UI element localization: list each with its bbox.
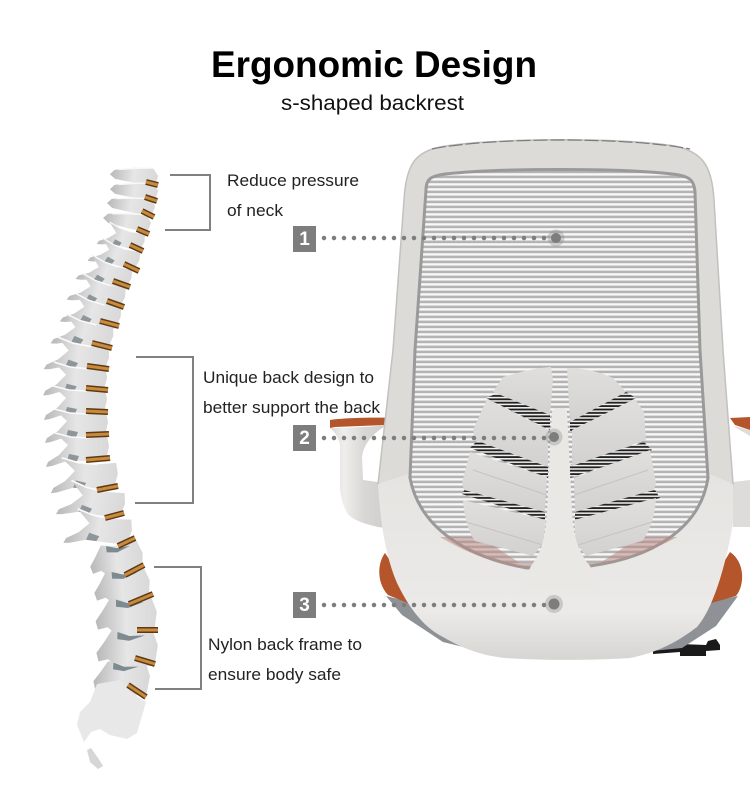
- text: nylon back frame: ensure body safe: [208, 665, 341, 684]
- mesh backrest: [410, 170, 708, 568]
- callout 2: 2: [299, 428, 310, 449]
- back frame: [378, 140, 733, 484]
- coccyx: [87, 748, 103, 769]
- callout 1: 1: [299, 229, 310, 250]
- subtitle: s-shaped backrest: [281, 92, 464, 115]
- intervertebral discs: [86, 182, 158, 697]
- cervical vertebrae: [102, 162, 159, 233]
- armrest pad left: [330, 418, 389, 428]
- thoracic vertebrae: [43, 220, 147, 496]
- text: unique back design: Unique back design to: [203, 368, 374, 387]
- frame lower base: [378, 470, 733, 660]
- armrest left: [330, 425, 387, 528]
- central spine support: [520, 408, 600, 590]
- sacrum: [77, 680, 146, 742]
- bracket: back: [135, 357, 193, 503]
- lumbar pads right: [567, 368, 656, 556]
- callout 3: 3: [299, 595, 310, 616]
- text: reduce pressure of neck: of neck: [227, 201, 284, 220]
- lumbar vertebrae: [56, 479, 158, 697]
- text: nylon back frame: Nylon back frame to: [208, 635, 362, 654]
- bracket: lumbar: [154, 567, 201, 689]
- chair illustration: [330, 140, 750, 660]
- orange side cushion right: [708, 552, 742, 604]
- grey under-shell: [386, 596, 738, 656]
- callout 2: [293, 425, 562, 451]
- orange side cushion left: [379, 553, 410, 604]
- frame top edge: [432, 140, 690, 149]
- callout 1: [293, 226, 564, 252]
- title: Ergonomic Design: [211, 44, 537, 85]
- lumbar pad creases: [466, 470, 652, 545]
- bracket: neck: [165, 175, 210, 230]
- callout 3: [293, 592, 563, 618]
- mesh lower tint: [440, 537, 677, 568]
- armrest pad right: [730, 417, 750, 430]
- lumbar pads left: [462, 367, 553, 556]
- armrest right: [733, 426, 750, 527]
- text: unique back design: [203, 368, 381, 417]
- gas lever: [653, 639, 720, 656]
- text: unique back design: better support the back: [203, 398, 381, 417]
- text: reduce pressure of neck: [227, 171, 359, 220]
- spine illustration: [43, 162, 159, 769]
- text: nylon back frame: [208, 635, 362, 684]
- lumbar slits: [462, 392, 660, 521]
- text: reduce pressure of neck: Reduce pressure: [227, 171, 359, 190]
